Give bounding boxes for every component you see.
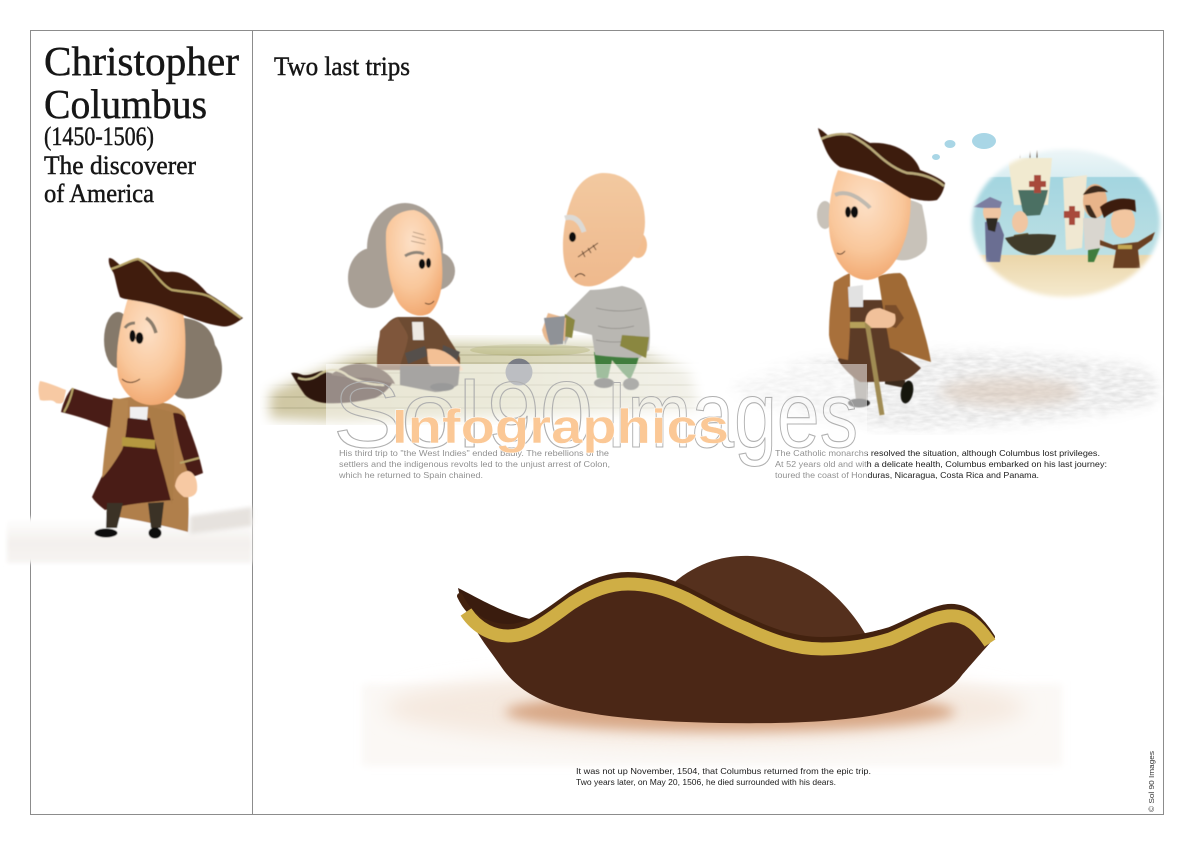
legs [848,366,915,408]
seated man head [386,210,442,316]
sidebar divider [252,30,254,814]
fallen hat [291,364,395,403]
caption: last journey: At 52 years old and with a delicate health, Columbus embarked on his last journey: [775,459,1107,469]
caption: death of Columbus: It was not up November, 1504, that Columbus returned from the epic trip. [576,766,871,776]
hair [104,312,222,399]
caption: third trip: His third trip to "the West Indies" ended badly. The rebellions of the [339,448,609,458]
bald man body [542,286,650,358]
watermark: Sol 90 Images: Images [606,362,858,467]
tricorn hat [818,128,945,201]
section heading: Two last trips [274,52,410,81]
caption: last journey: toured the coast of Honduras, Nicaragua, Costa Rica and Panama. [775,470,1039,480]
left brim tip [458,588,535,633]
cane and hand [865,308,896,415]
caption: death of Columbus [576,766,871,787]
cannon ball [506,358,532,386]
head [117,298,185,405]
title: Columbus [44,81,207,127]
coat and tunic [92,397,203,532]
ship [1008,148,1052,216]
caption: third trip: settlers and the indigenous revolts led to the unjust arrest of Colon, [339,459,610,469]
illustration: prison scene [260,173,710,425]
watermark: Infographics: Infographics [392,401,729,454]
coat and tunic [829,273,931,382]
tricorn hat [109,258,243,327]
pointing arm [38,381,113,428]
caption: third trip [338,448,610,480]
watermark: Sol 90 Images [333,362,858,467]
man in striped shirt [1083,184,1108,262]
illustration: Columbus with cane [715,128,1165,435]
man with blue hat [973,197,1004,262]
floor shadow [7,507,252,563]
sea, sky and sand [965,145,1167,301]
caption: third trip: which he returned to Spain chained. [338,470,483,480]
standard banner [1063,175,1087,250]
title: The discoverer [44,151,196,180]
watermark: Sol 90 Images: Sol [333,362,481,467]
crown [668,556,878,660]
caption: last journey: The Catholic monarchs resolved the situation, although Columbus lost privileges. [775,448,1100,458]
thought scene: landing in America [965,145,1167,301]
hat body [466,584,990,723]
thought bubbles [932,133,996,160]
copyright: © Sol 90 Images [1148,750,1156,812]
caption: death of Columbus: Two years later, on May 20, 1506, he died surrounded with his dears. [576,777,836,787]
rowing boat [1005,211,1056,255]
seated man hair [348,203,455,308]
illustration: Columbus pointing [7,258,252,563]
head [829,170,911,280]
cobbled floor [744,350,1164,432]
gold band [466,584,990,649]
illustration: large tricorn hat [362,556,1062,766]
seated man body [377,317,463,392]
watermark veil [326,364,867,490]
title [44,38,239,208]
right hand [175,471,197,497]
watermark: Sol 90 Images: 90 [487,362,593,467]
hat shadow [362,672,1062,766]
mini Columbus [1100,199,1155,268]
hair [817,198,927,260]
caption: last journey [775,448,1107,480]
title: (1450-1506) [44,122,154,151]
wooden floor [260,335,710,425]
back brim [860,630,906,656]
bald man head [563,173,647,286]
brim edge [460,575,992,640]
title: Christopher [44,38,239,84]
legs and feet [94,502,164,538]
title: of America [44,179,154,208]
bald man legs [594,352,640,390]
